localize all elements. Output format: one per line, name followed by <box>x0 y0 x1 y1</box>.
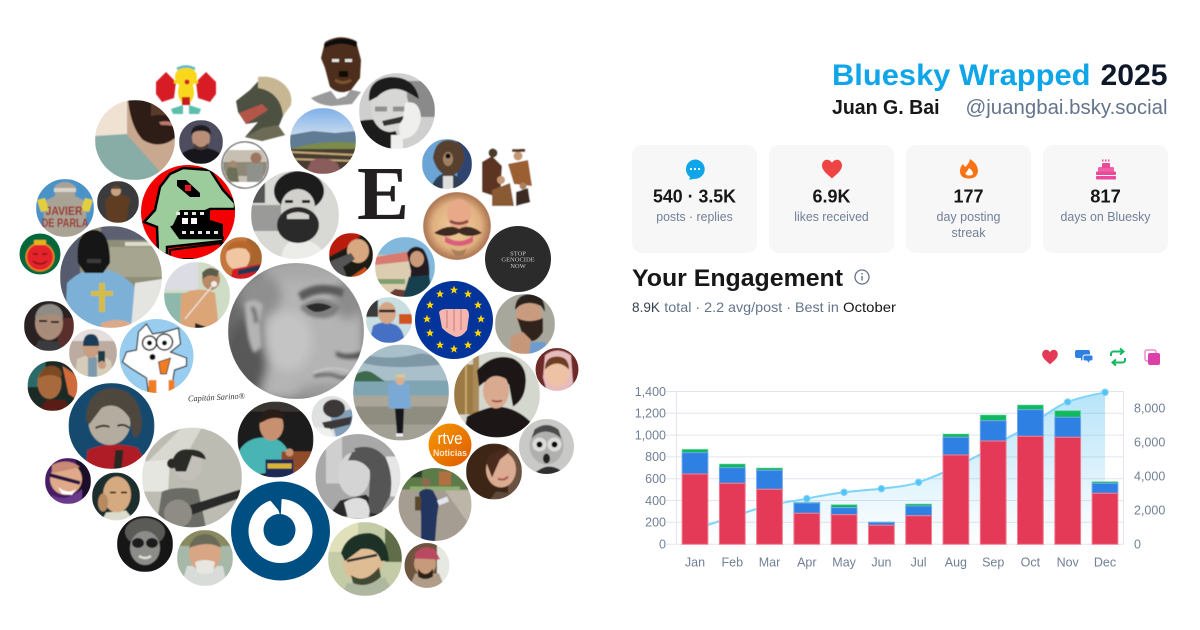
month labels: Jul <box>911 556 927 570</box>
left axis labels: 400 <box>645 494 666 508</box>
avatar: Stop Genocide Now: GENOCIDE <box>501 257 535 264</box>
left axis labels: 0 <box>659 538 666 552</box>
avatar: person by the sea <box>353 344 449 440</box>
reposts and quotes bars <box>682 405 1118 523</box>
gridlines <box>666 392 1124 544</box>
month labels: Sep <box>982 556 1004 570</box>
month labels: May <box>832 556 857 570</box>
icon: flame <box>960 159 978 178</box>
left axis labels: 1,000 <box>635 428 666 442</box>
avatar: woman in black and white <box>315 434 401 520</box>
icon: heart <box>822 160 842 178</box>
chart legend icons <box>1042 348 1160 366</box>
avatar: man reading map on stone path <box>398 468 472 542</box>
avatar: El Español E logo: E <box>357 152 409 236</box>
month labels: Dec <box>1094 556 1116 570</box>
heading: Your Engagement: Your Engagement <box>632 265 843 292</box>
icon: quotes <box>1145 350 1160 365</box>
left axis labels: 800 <box>645 450 666 464</box>
avatar: Tweety with boxing gloves <box>156 66 216 114</box>
icon: replies <box>1075 350 1093 364</box>
handle: @juangbai.bsky.social <box>966 97 1168 119</box>
avatar: bearded man with hand on chin <box>495 294 555 354</box>
avatar: bearded man closeup <box>95 100 175 180</box>
header <box>832 59 1168 119</box>
avatar: man in blue light <box>28 361 78 411</box>
avatar: metallic helmet face <box>117 516 173 572</box>
avatar: man in brown suit at blackboard <box>97 181 139 223</box>
stat card: posts and replies <box>632 145 757 253</box>
avatar: smiling man with glasses in purple <box>45 458 91 504</box>
avatar: Javier de Parla: DE PARLA <box>42 216 89 230</box>
avatar: two men on a terrace <box>221 142 269 188</box>
engagement summary: October <box>843 299 896 315</box>
avatar: Stop Genocide Now: STOP <box>510 250 526 258</box>
avatar: young man with glasses <box>328 522 402 596</box>
month labels: Apr <box>797 556 817 570</box>
avatar: chimpanzee reading <box>311 396 353 438</box>
month labels: Jun <box>871 556 892 570</box>
left axis labels: 200 <box>645 516 666 530</box>
month labels: Oct <box>1021 556 1041 570</box>
cumulative area <box>695 392 1105 544</box>
avatar: group in brown costumes <box>474 146 538 210</box>
avatar: boy with orange hair <box>220 237 262 279</box>
stat value: 817 <box>1090 186 1121 206</box>
avatar: moustache closeup <box>423 192 491 260</box>
avatar: Stop Genocide Now <box>485 226 551 292</box>
avatar: Darth Vader helmet at laptop <box>60 226 162 328</box>
avatar: presenter in teal shirt <box>238 402 314 478</box>
avatar label: Capitán Sarino signature: Capitán Sarino® <box>188 390 246 403</box>
cumulative line <box>695 392 1105 529</box>
avatar: RTVE Noticias logo: rtve <box>438 429 462 448</box>
avatar: woman playing guitar <box>142 428 242 528</box>
right axis labels: 8,000 <box>1134 402 1165 416</box>
month labels <box>685 556 1116 570</box>
right axis labels: 0 <box>1134 538 1141 552</box>
title: Bluesky Wrapped <box>832 59 1090 92</box>
avatar: Groucho Marx <box>359 73 435 149</box>
engagement summary: total · 2.2 avg/post · Best in <box>664 299 839 315</box>
avatar: Capitan Sarino cartoon <box>118 318 194 394</box>
avatar: woman with dark curly hair <box>454 352 540 438</box>
avatar: Christmas ornament <box>19 233 61 275</box>
stat card: posting streak <box>906 145 1031 253</box>
left axis labels: 600 <box>645 472 666 486</box>
avatar: woman with long brown hair <box>466 444 522 500</box>
stat value: 177 <box>954 186 984 206</box>
left axis labels <box>635 385 666 552</box>
avatar: man in black shirt <box>179 120 223 164</box>
stat label: posts · replies <box>656 209 733 224</box>
replies bars <box>682 410 1118 525</box>
month labels: Mar <box>759 556 780 570</box>
avatar: RTVE Noticias logo: Noticias <box>433 448 467 459</box>
avatar: man in beanie taking selfie <box>69 329 117 377</box>
stat card: days on Bluesky <box>1043 145 1168 253</box>
avatar: older man with white beard <box>177 530 233 586</box>
avatar: woman on city terrace <box>375 237 435 297</box>
month labels: Aug <box>945 556 967 570</box>
avatar: large grey portrait <box>224 257 364 403</box>
icon: chat bubble <box>686 160 705 180</box>
avatar: man on phone <box>164 262 230 328</box>
avatar: painting of girl with curls <box>68 383 154 469</box>
display name: Juan G. Bai <box>832 97 940 119</box>
title: 2025 <box>1100 59 1168 92</box>
avatar: man with glasses in blue shirt <box>366 297 412 343</box>
avatar: grey-haired man <box>24 301 74 351</box>
right axis labels: 4,000 <box>1134 470 1165 484</box>
stat value: 540 · 3.5K <box>653 186 736 206</box>
icon: likes <box>1042 350 1058 364</box>
avatar: cartoon man with moustache <box>311 37 361 106</box>
avatar collage <box>19 37 579 596</box>
avatar: blue circular logo <box>231 482 330 580</box>
stat label second line: streak <box>952 225 986 240</box>
avatar: man in red with tool <box>329 233 373 277</box>
avatar: bald man with hand on temple <box>92 472 140 520</box>
avatar: raptor with knitted hat <box>236 77 291 141</box>
avatar: RTVE Noticias logo <box>428 424 472 466</box>
left axis labels: 1,200 <box>635 406 666 420</box>
combo chart: monthly engagement and cumulative line <box>635 385 1165 570</box>
avatar: mountain landscape <box>290 108 356 174</box>
icon: info <box>855 270 869 284</box>
month labels: Nov <box>1057 556 1080 570</box>
avatar: European flag with fist <box>415 281 493 359</box>
right axis labels: 2,000 <box>1134 504 1165 518</box>
icon: reposts <box>1111 348 1125 366</box>
avatar: man in red cap <box>404 542 450 588</box>
engagement summary <box>632 299 896 315</box>
cumulative points <box>804 389 1108 502</box>
stat label: likes received <box>794 209 869 224</box>
stat card: likes <box>769 145 894 253</box>
likes bars <box>682 436 1118 544</box>
right axis labels <box>1134 402 1165 552</box>
engagement summary: 8.9K <box>632 299 661 315</box>
stat value: 6.9K <box>812 186 850 206</box>
right axis labels: 6,000 <box>1134 436 1165 450</box>
avatar: Javier de Parla: JAVIER <box>46 204 83 218</box>
month labels: Feb <box>722 556 743 570</box>
avatar: bearded man in black and white <box>251 171 339 259</box>
avatar: Javier de Parla <box>36 179 94 237</box>
avatar: Stop Genocide Now: NOW <box>510 263 527 270</box>
stat label: day posting <box>936 209 1000 224</box>
avatar: cartoon kid with goggles <box>518 418 574 474</box>
avatar: man with dog head <box>422 139 472 189</box>
left axis labels: 1,400 <box>635 385 666 399</box>
avatar: pixel dinosaur <box>141 165 235 259</box>
icon: birthday cake <box>1096 160 1116 180</box>
avatar: child in pink hood <box>535 348 579 392</box>
month labels: Jan <box>685 556 705 570</box>
stat label: days on Bluesky <box>1060 209 1151 224</box>
